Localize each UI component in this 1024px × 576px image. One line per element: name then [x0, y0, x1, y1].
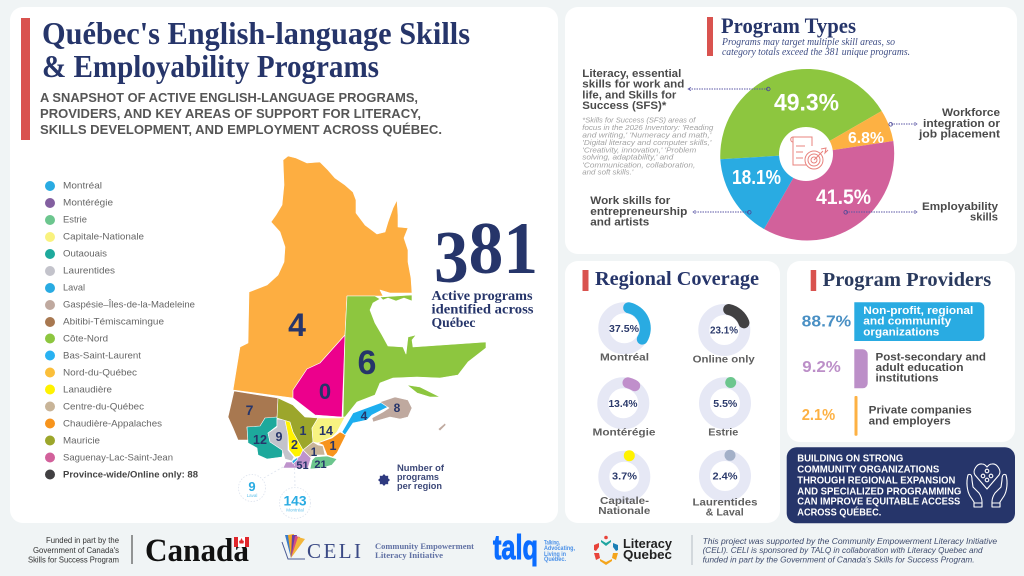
- subheading note: Programs may target multiple skill areas, so: [721, 37, 895, 48]
- subtitle: [40, 90, 442, 137]
- legend: regions: Laval: [63, 282, 85, 294]
- icon: Literacy Quebec emblem: [594, 536, 618, 565]
- label: work skills: [590, 195, 688, 228]
- heading: program providers: Program Providers: [823, 269, 991, 291]
- provider: non-profit: organizations: [863, 326, 939, 338]
- subtitle: SKILLS DEVELOPMENT, AND EMPLOYMENT ACROSS QUÉBEC.: [40, 122, 442, 137]
- map region counts: 7: [246, 402, 254, 418]
- legend: regions: [45, 180, 198, 480]
- arrow: employability leader: [844, 210, 917, 214]
- donut: Montréal: Montréal: [600, 352, 649, 364]
- donut: online only: 23.1%: [710, 325, 739, 337]
- logo: CELI: Literacy Initiative: [375, 550, 443, 560]
- map key: per region: [397, 481, 442, 492]
- donut: Montréal: 37.5%: [609, 323, 640, 335]
- callout: key takeaway: [787, 447, 1015, 523]
- donut: Capitale-Nationale: 3.7%: [612, 471, 638, 483]
- label: workforce integration: [918, 107, 1001, 140]
- logo: TALQ: Living in: [544, 552, 566, 558]
- footnote: Skills for Success: and soft skills.': [582, 168, 634, 177]
- callout: key takeaway: THROUGH REGIONAL EXPANSION: [797, 474, 955, 486]
- map key: [378, 463, 445, 492]
- footnote: Skills for Success: 'Digital literacy and computer skills,': [582, 138, 712, 147]
- icon: hands holding heart: [967, 464, 1007, 507]
- map region counts: 14: [319, 424, 333, 438]
- heading: regional coverage: Regional Coverage: [595, 268, 759, 290]
- provider: private companies: Private companies: [869, 405, 972, 417]
- statistic: 381 active programs: identified across: [432, 302, 534, 318]
- map region counts: 9: [276, 430, 283, 444]
- pie chart: 6.8%: [848, 130, 884, 147]
- legend: regions: Laurentides: [63, 266, 115, 276]
- map region counts: 0: [319, 379, 331, 404]
- donut: online only: [693, 310, 755, 366]
- pie chart: 41.5%: [816, 186, 871, 209]
- title: & Employability Programs: [42, 48, 379, 84]
- pie chart: 18.1%: [732, 167, 781, 189]
- footnote: Skills for Success: solving, adaptability,' and: [582, 153, 674, 162]
- footer: project acknowledgement: (CELI). CELI is sponsored by TALQ in collaboration with Literacy Quebec and: [703, 545, 984, 555]
- logo: CELI: Community Empowerment: [375, 541, 474, 551]
- legend: regions: Estrie: [63, 214, 87, 226]
- map region counts: 4: [288, 307, 306, 343]
- region: Bas-Saint-Laurent: [342, 402, 388, 435]
- legend: regions: Côte-Nord: [63, 334, 108, 344]
- region: Abitibi-Témiscamingue: [228, 391, 278, 440]
- callout: Montréal count: 143: [284, 492, 307, 508]
- region: Centre-du-Québec: [303, 442, 325, 457]
- provider: post-secondary: Post-secondary and: [876, 351, 986, 363]
- logo: TALQ: Québec.: [544, 557, 566, 563]
- region: Saguenay-Lac-Saint-Jean: [293, 335, 345, 417]
- donut: Capitale-Nationale: Capitale-: [600, 495, 650, 507]
- logo: Literacy Quebec: Literacy: [623, 537, 672, 551]
- legend: regions: Chaudière-Appalaches: [63, 418, 162, 430]
- logo: TALQ: Talking,: [544, 540, 560, 546]
- callout: key takeaway: ACROSS QUÉBEC.: [797, 505, 881, 518]
- region: Montérégie: [283, 450, 311, 468]
- logo: Literacy Quebec: Quebec: [623, 548, 672, 562]
- legend: regions: Saguenay-Lac-Saint-Jean: [63, 452, 173, 464]
- footnote: Skills for Success: 'Communication, collaboration,: [582, 160, 695, 169]
- footer: funding statement: [28, 535, 119, 564]
- map region counts: [246, 307, 401, 472]
- map region counts: 4: [361, 409, 368, 423]
- label: literacy: life, and Skills for: [582, 89, 677, 101]
- donut: Montérégie: 13.4%: [608, 398, 638, 410]
- donut: Laurentides and Laval: & Laval: [706, 507, 744, 519]
- legend: regions: Capitale-Nationale: [63, 232, 144, 242]
- legend: regions: Province-wide/Online only: 88: [63, 470, 198, 480]
- region: Lanaudière: [285, 420, 303, 457]
- label: work skills: and artists: [590, 216, 649, 228]
- legend: regions: Lanaudière: [63, 384, 112, 396]
- map region counts: 51: [296, 460, 309, 472]
- donut: Estrie: 5.5%: [713, 398, 738, 410]
- heading accent bar: [582, 270, 588, 291]
- heading: program types: Program Types: [721, 13, 856, 38]
- region: Côte-Nord north strip: [380, 295, 412, 301]
- callout: key takeaway: COMMUNITY ORGANIZATIONS: [797, 464, 939, 476]
- donut: Capitale-Nationale: [598, 450, 650, 517]
- label: work skills: entrepreneurship: [590, 206, 688, 218]
- provider: post-secondary: [802, 349, 986, 388]
- legend: regions: Abitibi-Témiscamingue: [63, 316, 164, 328]
- footer: funding statement: Funded in part by the: [46, 535, 119, 545]
- subtitle: PROVIDERS, AND KEY AREAS OF SUPPORT FOR LITERACY,: [40, 106, 421, 121]
- provider: private companies: [802, 396, 972, 436]
- label: workforce integration: job placement: [918, 128, 1000, 140]
- map region counts: 2: [291, 438, 298, 452]
- label: work skills: Work skills for: [590, 195, 671, 207]
- provider: post-secondary: 9.2%: [802, 359, 841, 376]
- donut: online only: Online only: [693, 354, 755, 366]
- statistic: 381 active programs: Québec: [432, 316, 476, 331]
- logo: TALQ: talq: [493, 529, 538, 567]
- arrow: workforce leader: [889, 122, 917, 126]
- map region counts: 8: [394, 401, 401, 415]
- region: Anticosti: [407, 385, 440, 397]
- donut: Montréal: [600, 308, 649, 364]
- arrow: work skills leader: [693, 210, 751, 214]
- heading accent bar: [21, 18, 30, 140]
- label: employability: [922, 201, 999, 224]
- donut: Laurentides and Laval: [692, 450, 758, 519]
- donut: Laurentides and Laval: 2.4%: [712, 470, 738, 482]
- callout: Montréal count: [280, 464, 310, 518]
- callout: key takeaway: CAN IMPROVE EQUITABLE ACCESS: [797, 496, 960, 508]
- footnote: Skills for Success: and writing,' 'Numeracy and math,': [582, 130, 712, 140]
- map region counts: 1: [300, 424, 307, 438]
- legend: regions: Centre-du-Québec: [63, 402, 144, 412]
- legend: regions: Mauricie: [63, 436, 100, 446]
- legend: regions: Gaspésie–Îles-de-la-Madeleine: [63, 300, 195, 310]
- panel: regional coverage: [565, 261, 780, 523]
- statistic: 381 active programs: 81: [469, 208, 538, 290]
- label: workforce integration: integration or: [923, 118, 1001, 130]
- callout: key takeaway: BUILDING ON STRONG: [797, 453, 903, 465]
- map region counts: 1: [330, 439, 337, 453]
- legend: regions: Montérégie: [63, 198, 113, 208]
- region: Îles-de-la-Madeleine: [438, 423, 446, 431]
- label: literacy: Success (SFS)*: [582, 100, 667, 112]
- footer: funding statement: Government of Canada's: [33, 545, 119, 555]
- region: Outaouais: [247, 417, 283, 459]
- label: workforce integration: Workforce: [942, 107, 1000, 119]
- arrow: literacy leader: [688, 87, 770, 91]
- map region counts: 21: [314, 459, 327, 471]
- pie chart: [720, 69, 894, 240]
- logo: Literacy Quebec: [594, 536, 672, 565]
- callout: key takeaway: AND SPECIALIZED PROGRAMMING: [797, 485, 961, 497]
- map region counts: 6: [358, 344, 376, 382]
- map region counts: 12: [253, 433, 267, 447]
- provider: non-profit: Non-profit, regional: [863, 305, 973, 317]
- label: employability: Employability: [922, 201, 999, 213]
- region: Capitale-Nationale: [312, 417, 345, 443]
- statistic: 381 active programs: Active programs: [432, 289, 533, 304]
- label: literacy: [582, 68, 684, 112]
- donut: Estrie: Estrie: [708, 427, 738, 439]
- provider: non-profit: and community: [863, 316, 952, 328]
- label: employability: skills: [970, 212, 998, 224]
- region: Estrie: [310, 456, 337, 469]
- legend: regions: Nord-du-Québec: [63, 368, 137, 378]
- donut: Laurentides and Laval: Laurentides: [692, 497, 758, 509]
- region: Laurentides: [268, 419, 294, 461]
- subheading note: category totals exceed the 381 unique programs.: [722, 47, 910, 58]
- logo: TALQ: Advocating,: [544, 546, 575, 552]
- provider: non-profit: [802, 302, 984, 341]
- callout: Laval count: 9: [248, 479, 256, 494]
- donut: Montérégie: [592, 383, 656, 439]
- region: Montréal and Laval: [292, 457, 298, 464]
- label: literacy: Literacy, essential: [582, 68, 681, 80]
- footer: project acknowledgement: funded in part by the Government of Canada's Skills for Success Program.: [703, 554, 975, 564]
- icon: checklist and target: [791, 137, 828, 169]
- footer: project acknowledgement: [703, 536, 997, 564]
- footer: funding statement: Skills for Success Program: [28, 554, 119, 564]
- map of Québec regions: [228, 156, 486, 469]
- footer: project acknowledgement: This project was supported by the Community Empowerment Literacy Initiative: [703, 536, 997, 546]
- region: Mauricie: [277, 398, 318, 450]
- statistic: 381 active programs: [432, 208, 538, 331]
- provider: post-secondary: adult education: [876, 362, 964, 374]
- provider: private companies: 2.1%: [802, 407, 835, 424]
- map key: programs: [397, 472, 439, 483]
- legend: regions: Outaouais: [63, 248, 107, 260]
- region: Gaspésie: [372, 397, 412, 422]
- region: Côte-Nord: [343, 296, 486, 417]
- footnote: Skills for Success: *Skills for Success (SFS) areas of: [582, 116, 696, 124]
- footnote: Skills for Success: 'Creativity, innovation,' 'Problem: [582, 145, 696, 154]
- logo: CELI: [282, 534, 474, 563]
- panel: overview and map: [10, 7, 558, 523]
- legend: regions: Montréal: [63, 180, 102, 192]
- callout: Montréal count: Montréal: [286, 508, 304, 512]
- subheading note: [721, 37, 910, 58]
- heading accent bar: [707, 17, 713, 56]
- donut: Capitale-Nationale: Nationale: [598, 505, 650, 517]
- logo: Canada wordmark: Canada: [145, 533, 249, 569]
- icon: region badge: [378, 474, 390, 486]
- label: literacy: skills for work and: [582, 79, 684, 91]
- provider: private companies: and employers: [869, 415, 951, 427]
- panel: program providers: [787, 261, 1015, 442]
- subtitle: A SNAPSHOT OF ACTIVE ENGLISH-LANGUAGE PROGRAMS,: [40, 90, 418, 105]
- map region counts: 1: [311, 447, 318, 459]
- provider: post-secondary: institutions: [876, 373, 938, 385]
- map key: Number of: [397, 463, 445, 474]
- panel: program types: [565, 7, 1017, 254]
- provider: non-profit: 88.7%: [802, 314, 851, 330]
- icon: CELI fanned book: [282, 534, 305, 559]
- region: Chaudière-Appalaches: [318, 432, 346, 457]
- legend: regions: Bas-Saint-Laurent: [63, 350, 141, 362]
- title: [42, 15, 470, 84]
- statistic: 381 active programs: 3: [434, 217, 469, 299]
- heading accent bar: [811, 270, 816, 291]
- footnote: Skills for Success: focus in the 2026 Inventory: 'Reading: [582, 123, 714, 132]
- donut: Estrie: [704, 377, 746, 439]
- donut: Montérégie: Montérégie: [592, 427, 656, 439]
- pie chart: 49.3%: [774, 90, 839, 116]
- title: Québec's English-language Skills: [42, 15, 470, 51]
- logo: CELI: CELI: [307, 539, 361, 563]
- footnote: Skills for Success: [582, 116, 714, 177]
- callout: Laval count: Laval: [247, 493, 257, 498]
- callout: Laval count: [238, 467, 283, 502]
- region: Nord-du-Québec: [233, 156, 412, 398]
